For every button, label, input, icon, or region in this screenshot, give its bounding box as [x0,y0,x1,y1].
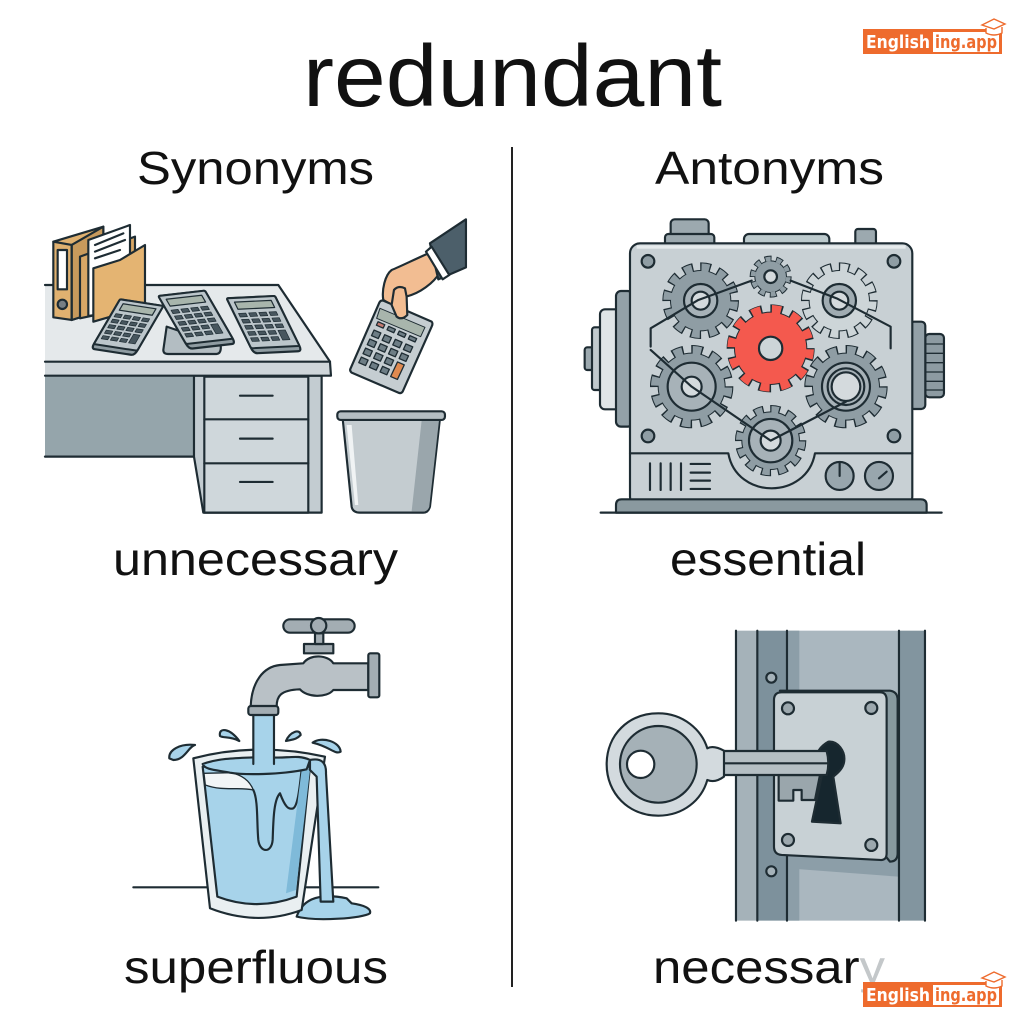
gear: bottom left [655,350,728,423]
logo: top right: English [866,32,930,53]
gear: bottom centre [739,409,802,472]
label: necessary: necessar y [653,941,885,993]
gear: top right [806,267,873,334]
logo: bottom right: ing.app [935,985,997,1006]
illustration: machine with gears [585,219,944,513]
logo: bottom right: English [866,985,930,1006]
calculator: held in hand [350,301,432,393]
title: redundant [303,28,722,125]
logo: bottom right [863,972,1005,1007]
logo: top right: ing.app [935,32,997,53]
gear: bottom right [809,350,883,423]
gear: top centre small [753,259,788,294]
illustration: overflowing glass under faucet [133,618,379,919]
illustration: key in lock plate [607,631,925,921]
illustration: desk with calculators and trash bin [45,219,466,513]
label: essential: essential [670,533,866,585]
gear: central red [731,309,810,388]
heading: antonyms: Antonyms [655,142,884,194]
logo: top right [863,19,1005,54]
heading: synonyms: Synonyms [137,142,374,194]
label: unnecessary: unnecessary [113,533,398,585]
belts [651,281,891,441]
label: superfluous: superfluous [124,941,388,993]
divider [511,147,513,987]
gear: top left [667,267,734,334]
